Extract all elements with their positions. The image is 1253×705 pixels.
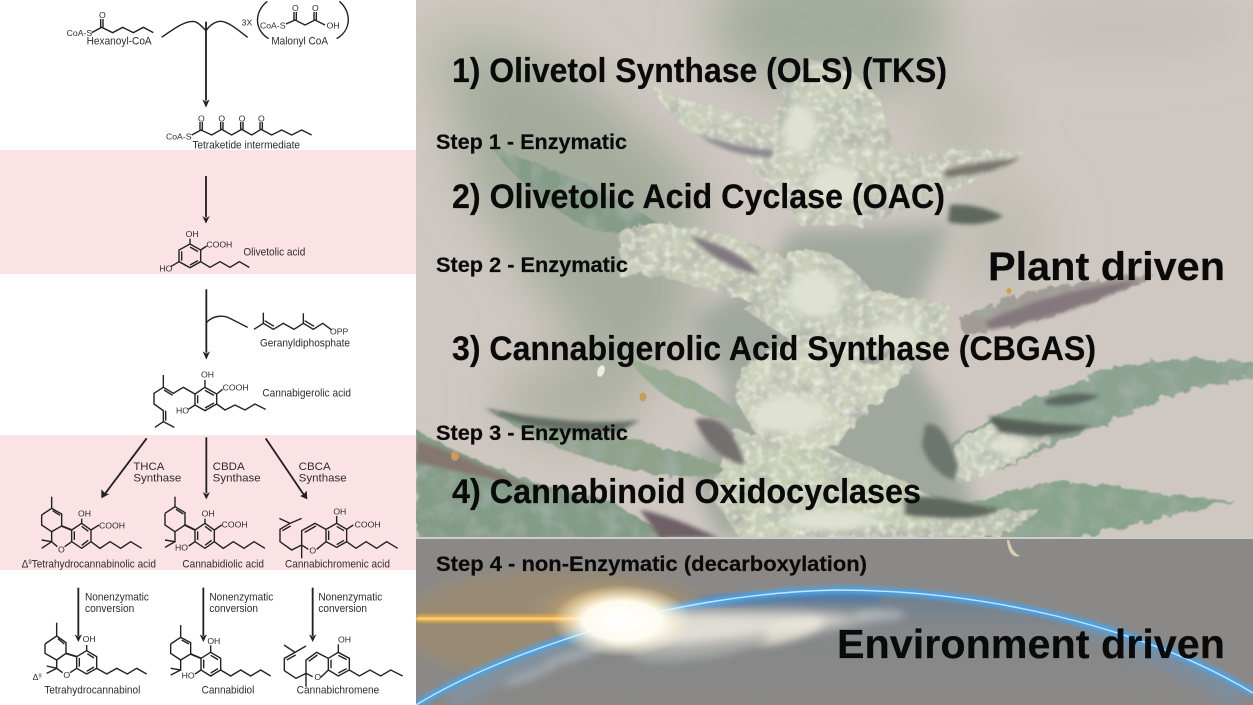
upper pathway: hexanoyl-CoA to olivetolic acid <box>67 1 348 274</box>
molecule: tetrahydrocannabinolic acid: Tetrahydrocannabinolic acid <box>32 558 156 570</box>
arrow: CBDA synthase <box>203 437 261 499</box>
molecule: cannabigerolic acid: COOH <box>223 383 249 393</box>
clouds <box>502 609 905 689</box>
highlight band: synthase step <box>0 435 416 570</box>
molecule: tetrahydrocannabinolic acid: Δ <box>22 558 29 570</box>
molecule: tetraketide intermediate: Tetraketide intermediate <box>192 140 300 152</box>
sun flare <box>416 585 880 657</box>
label: step 3: Step 3 - Enzymatic <box>436 421 628 445</box>
molecule: cannabigerolic acid: OH <box>201 370 214 380</box>
molecule: olivetolic acid <box>159 229 305 274</box>
molecule: malonyl CoA: O <box>312 3 319 13</box>
molecule: tetrahydrocannabinol: OH <box>83 634 96 644</box>
reaction arrow: condensation <box>162 21 248 108</box>
molecule: tetrahydrocannabinolic acid: 9 <box>28 559 32 566</box>
molecule: tetrahydrocannabinol: Tetrahydrocannabinol <box>44 685 140 697</box>
arrow: nonenzymatic conversion to CBD <box>200 588 274 642</box>
molecule: tetrahydrocannabinol <box>33 623 147 697</box>
arrow: nonenzymatic conversion to CBC: Nonenzymatic <box>318 591 383 603</box>
blurred background foliage <box>416 0 1168 537</box>
molecule: tetrahydrocannabinol: Δ <box>33 672 38 682</box>
molecule: cannabichromenic acid: COOH <box>355 520 381 530</box>
molecule: hexanoyl-CoA: O <box>99 10 106 20</box>
arrow: THCA synthase <box>101 438 181 498</box>
arrow: CBCA synthase: CBCA <box>299 461 332 473</box>
warm sky haze <box>416 570 698 670</box>
arrow: CBCA synthase <box>266 438 347 499</box>
molecule: geranyldiphosphate <box>254 313 350 350</box>
molecule: cannabichromenic acid: OH <box>333 507 346 517</box>
plant: frosted flower bud arms <box>620 60 1060 538</box>
molecule: hexanoyl-CoA: Hexanoyl-CoA <box>87 36 152 48</box>
label: step 1: Step 1 - Enzymatic <box>436 130 627 154</box>
molecule: malonyl CoA: Malonyl CoA <box>271 36 329 48</box>
molecule: cannabichromene: OH <box>338 635 351 645</box>
molecule: tetrahydrocannabinolic acid: O <box>58 544 65 554</box>
middle pathway: cannabigerolic acid and synthases <box>101 289 351 499</box>
molecule: tetraketide intermediate <box>166 113 312 152</box>
arrow: tetraketide to olivetolic acid <box>202 176 210 224</box>
molecule: cannabidiol: Cannabidiol <box>202 685 254 697</box>
plant: pale resin highlights <box>754 106 1030 530</box>
plant: serrated fan leaves <box>416 145 1253 545</box>
arrow: nonenzymatic conversion to CBC <box>309 588 383 642</box>
lower pathway: acids and neutral cannabinoids <box>22 497 403 697</box>
molecule: cannabidiolic acid: COOH <box>222 520 248 530</box>
arrow: CBDA synthase: CBDA <box>213 461 246 473</box>
molecule: geranyldiphosphate: Geranyldiphosphate <box>260 338 350 350</box>
molecule: tetrahydrocannabinol: O <box>63 670 70 680</box>
molecule: cannabidiol: OH <box>207 636 220 646</box>
molecule: olivetolic acid: COOH <box>206 240 232 250</box>
molecule: cannabidiolic acid: Cannabidiolic acid <box>182 558 264 570</box>
molecule: cannabichromenic acid: O <box>309 545 316 555</box>
molecule: malonyl CoA: O <box>292 3 299 13</box>
molecule: cannabidiolic acid: OH <box>202 508 215 518</box>
heading: olivetolic acid cyclase: 2) Olivetolic Acid Cyclase (OAC) <box>452 178 945 216</box>
label: step 2: Step 2 - Enzymatic <box>436 253 628 277</box>
panel: earth from space background <box>400 539 1253 705</box>
molecule: tetraketide intermediate: O <box>218 113 225 123</box>
arrow: CBDA synthase: Synthase <box>213 473 261 485</box>
molecule: cannabidiolic acid <box>165 497 265 570</box>
arrow: nonenzymatic conversion to CBC: conversion <box>318 603 367 615</box>
molecule: tetraketide intermediate: O <box>239 113 246 123</box>
molecule: olivetolic acid: OH <box>186 229 199 239</box>
molecule: tetrahydrocannabinolic acid: OH <box>78 509 91 519</box>
molecule: malonyl CoA: CoA-S <box>260 21 286 31</box>
falling seed detail <box>1007 540 1020 557</box>
plant: purple streaks and dark shadows <box>416 135 1140 538</box>
arrow: nonenzymatic conversion to CBD: Nonenzymatic <box>209 591 274 603</box>
molecule: olivetolic acid: HO <box>159 264 173 274</box>
molecule: tetraketide intermediate: O <box>198 113 205 123</box>
atmosphere rim <box>416 590 1253 705</box>
molecule: cannabidiol <box>171 625 271 697</box>
molecule: hexanoyl-CoA: CoA-S <box>67 28 92 38</box>
arrow: geranyl diphosphate addition <box>203 289 248 360</box>
molecule: cannabigerolic acid <box>154 370 351 427</box>
heading: cannabinoid oxidocyclases: 4) Cannabinoid Oxidocyclases <box>452 473 921 511</box>
divider between plant and earth <box>416 537 1253 539</box>
molecule: tetrahydrocannabinolic acid <box>22 497 156 570</box>
molecule: cannabichromene <box>284 635 403 697</box>
sun glow <box>542 585 677 626</box>
plant: orange pistils and fallen petal <box>451 288 1012 461</box>
panel: cannabis plant photo background <box>390 0 1253 560</box>
heading: environment driven: Environment driven <box>837 621 1225 667</box>
earth: blue tint along rim <box>447 640 590 705</box>
heading: olivetol synthase: 1) Olivetol Synthase (OLS) (TKS) <box>452 52 947 90</box>
molecule: cannabigerolic acid: HO <box>176 405 189 415</box>
arrow: nonenzymatic conversion to CBD: conversion <box>209 603 258 615</box>
arrow: CBCA synthase: Synthase <box>299 473 347 485</box>
molecule: malonyl CoA: 3X <box>242 17 252 27</box>
molecule: cannabichromenic acid <box>279 507 398 570</box>
arrow: nonenzymatic conversion to THC <box>75 588 150 642</box>
molecule: olivetolic acid: Olivetolic acid <box>243 246 305 258</box>
molecule: hexanoyl-CoA <box>67 10 153 48</box>
molecule: tetrahydrocannabinol: 9 <box>38 673 42 679</box>
heading: cannabigerolic acid synthase: 3) Cannabigerolic Acid Synthase (CBGAS) <box>452 330 1096 368</box>
arrow: THCA synthase: THCA <box>133 461 165 473</box>
molecule: cannabidiol: HO <box>182 671 195 681</box>
arrow: nonenzymatic conversion to THC: conversion <box>85 603 134 615</box>
heading: plant driven: Plant driven <box>988 245 1225 289</box>
molecule: malonyl CoA <box>242 1 348 48</box>
earth globe <box>498 592 1070 682</box>
plant: shaded interior under the bud <box>690 225 985 538</box>
molecule: tetraketide intermediate: O <box>258 113 265 123</box>
molecule: cannabichromene: O <box>314 672 321 682</box>
molecule: malonyl CoA: OH <box>327 21 340 31</box>
arrow: THCA synthase: Synthase <box>133 473 181 485</box>
molecule: tetraketide intermediate: CoA-S <box>166 131 192 141</box>
panel: biosynthesis pathway diagram <box>0 0 416 705</box>
molecule: cannabichromenic acid: Cannabichromenic acid <box>285 558 390 570</box>
molecule: cannabigerolic acid: Cannabigerolic acid <box>262 387 351 399</box>
molecule: tetrahydrocannabinolic acid: COOH <box>99 521 125 531</box>
molecule: geranyldiphosphate: OPP <box>330 327 349 337</box>
label: step 4: Step 4 - non-Enzymatic (decarboxylation) <box>436 552 867 576</box>
molecule: cannabichromene: Cannabichromene <box>297 685 379 697</box>
highlight band: olivetolic acid step <box>0 150 416 274</box>
molecule: cannabidiolic acid: HO <box>175 542 188 552</box>
arrow: nonenzymatic conversion to THC: Nonenzymatic <box>85 591 150 603</box>
